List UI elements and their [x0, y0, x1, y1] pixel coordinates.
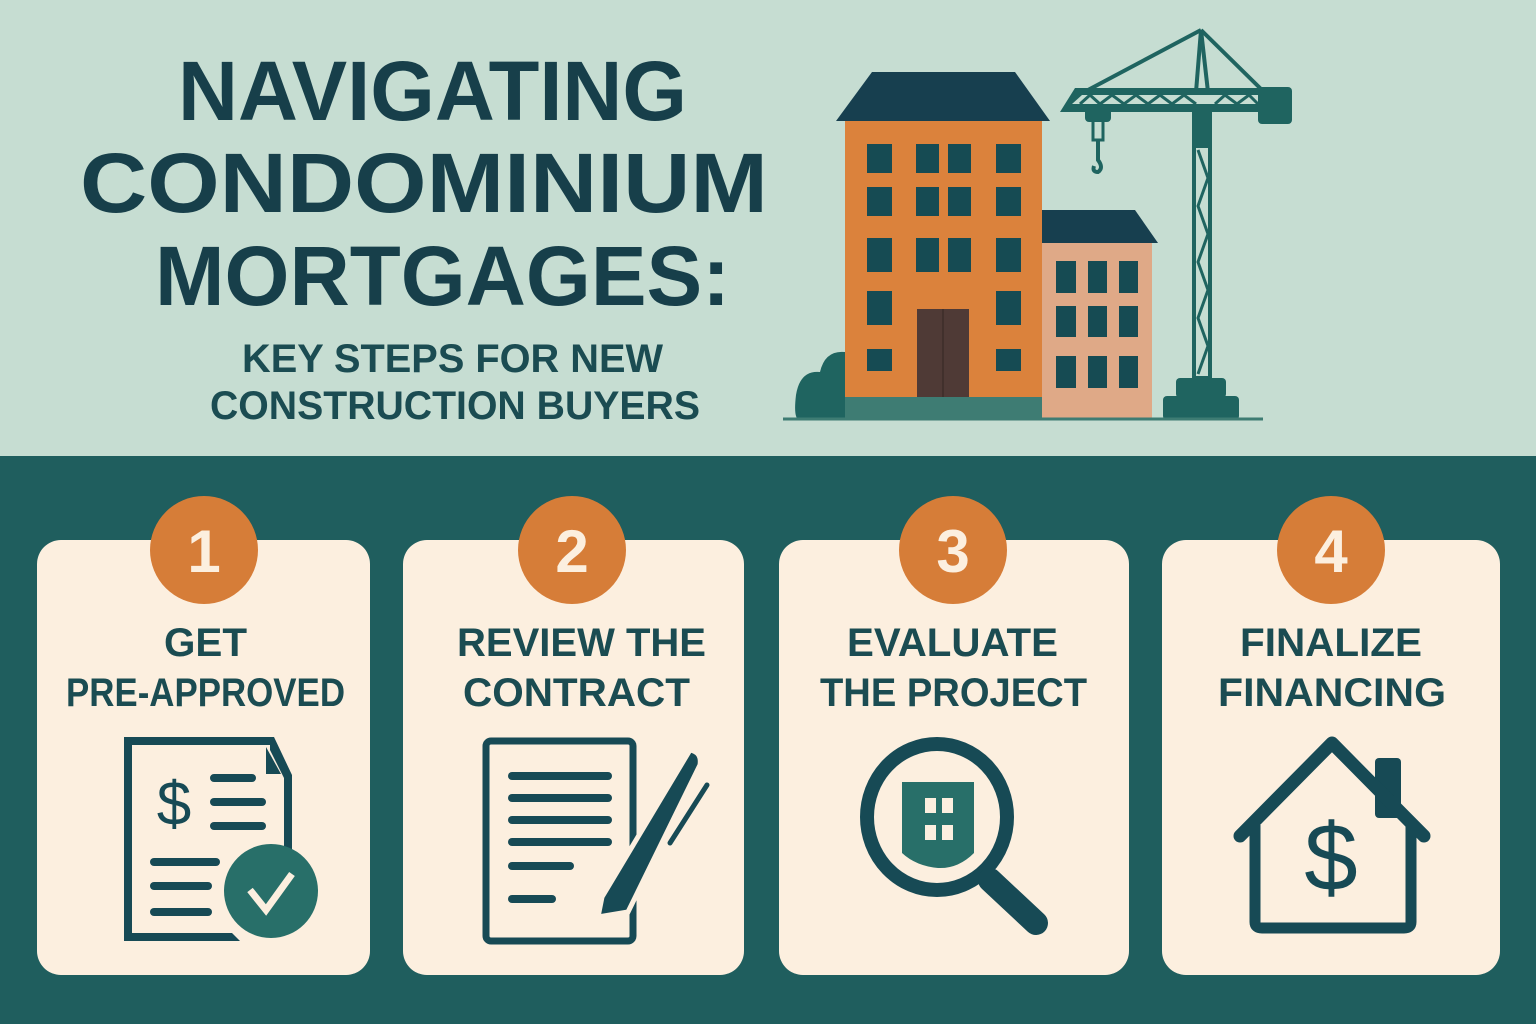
- icon: contract with pen: [486, 741, 707, 941]
- heading 2: [457, 621, 706, 715]
- heading 2: REVIEW THE: [457, 621, 706, 665]
- badge 3: 3: [936, 518, 970, 585]
- heading 3: EVALUATE: [847, 621, 1058, 665]
- heading 3: THE PROJECT: [820, 671, 1087, 715]
- panel: step 2: [403, 496, 744, 975]
- badge 1: 1: [187, 518, 221, 585]
- icon: house with dollar: $: [1304, 804, 1358, 911]
- subtitle: CONSTRUCTION BUYERS: [210, 384, 700, 428]
- panel: step 3: [779, 496, 1129, 975]
- heading 3: [820, 621, 1087, 715]
- title: CONDOMINIUM: [80, 136, 768, 230]
- icon: house with dollar: [1240, 743, 1424, 928]
- heading 4: FINALIZE: [1240, 621, 1422, 665]
- panel: step 4: [1162, 496, 1500, 975]
- title: [80, 44, 768, 323]
- badge 3: [899, 496, 1007, 604]
- badge 1: [150, 496, 258, 604]
- crane: [1060, 30, 1292, 420]
- heading 4: [1218, 621, 1446, 715]
- icon: document with check: [124, 737, 318, 941]
- badge 4: 4: [1314, 518, 1348, 585]
- badge 2: [518, 496, 626, 604]
- panel: step 1: [37, 496, 370, 975]
- title: MORTGAGES:: [155, 229, 730, 323]
- badge 4: [1277, 496, 1385, 604]
- heading 1: [66, 621, 345, 715]
- subtitle: [210, 337, 700, 428]
- heading 2: CONTRACT: [463, 671, 690, 715]
- heading 1: PRE-APPROVED: [66, 671, 345, 715]
- illustration: buildings and crane: [783, 30, 1292, 420]
- icon: document with check: $: [157, 770, 191, 839]
- icon: magnifier with building: [867, 744, 1036, 923]
- subtitle: KEY STEPS FOR NEW: [242, 337, 663, 381]
- bush: [795, 352, 845, 420]
- heading 1: GET: [164, 621, 247, 665]
- small building: [1042, 243, 1152, 418]
- main building: [845, 121, 1042, 401]
- title: NAVIGATING: [178, 44, 687, 138]
- badge 2: 2: [555, 518, 589, 585]
- heading 4: FINANCING: [1218, 671, 1446, 715]
